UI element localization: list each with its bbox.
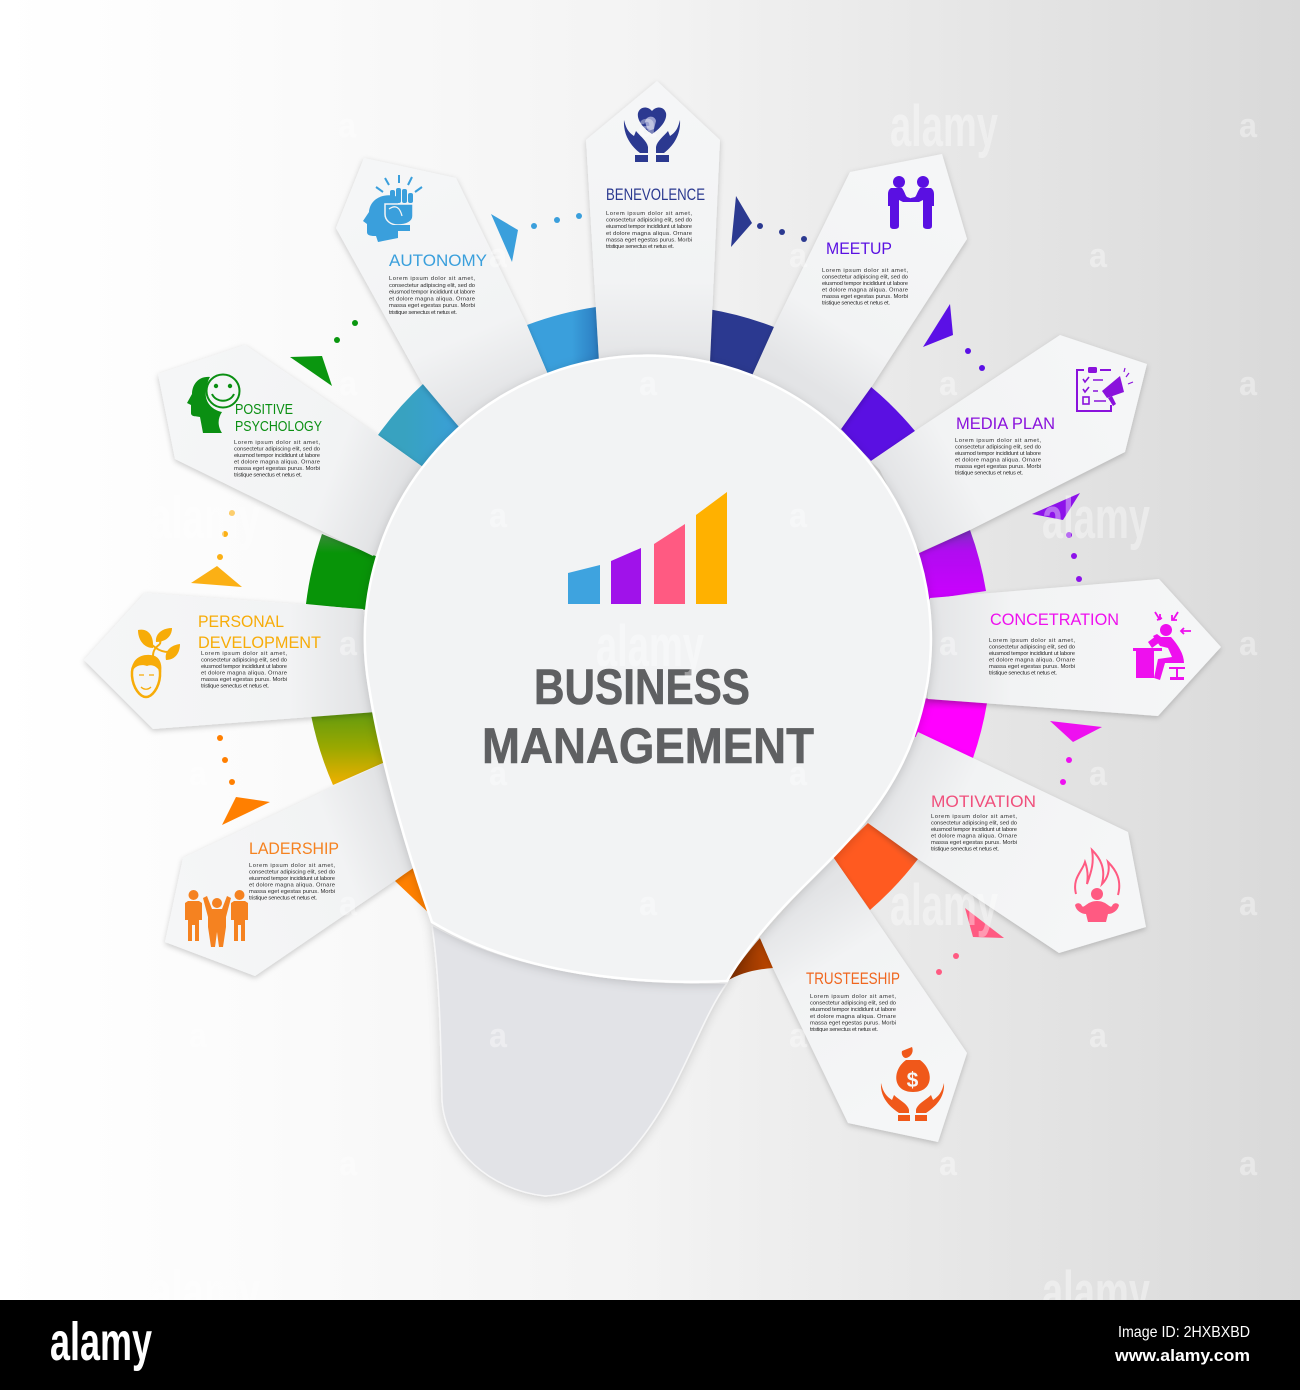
block: meetup indigo — [841, 386, 915, 461]
watermark pattern: a — [639, 365, 658, 403]
body text: eiusmod tempor incididunt ut labore — [989, 651, 1075, 657]
body text: tristique senectus et netus et. — [201, 684, 269, 690]
panel shape — [928, 579, 1221, 716]
watermark pattern: a — [1239, 885, 1258, 923]
body text — [989, 638, 1075, 676]
body text — [234, 440, 320, 478]
icon: flame over person — [1075, 850, 1119, 922]
heading: LADERSHIP — [249, 840, 339, 858]
connector: concentration arrow — [1050, 721, 1102, 785]
body text: eiusmod tempor incididunt ut labore — [606, 224, 692, 230]
heading: BENEVOLENCE — [606, 186, 705, 204]
panel shape — [586, 81, 720, 362]
body text: massa eget egestas purus. Morbi — [249, 889, 335, 895]
body text: tristique senectus et netus et. — [955, 470, 1023, 476]
connector: meetup arrow — [923, 304, 985, 371]
body text: tristique senectus et netus et. — [931, 846, 999, 852]
website: www.alamy.com — [1114, 1346, 1250, 1365]
body text: massa eget egestas purus. Morbi — [931, 840, 1017, 846]
colour blocks ring — [306, 307, 987, 981]
watermark pattern: a — [489, 497, 508, 535]
watermark pattern: a — [339, 1145, 358, 1183]
body text: eiusmod tempor incididunt ut labore — [955, 451, 1041, 457]
watermark pattern: alamy — [150, 1260, 260, 1325]
body text — [201, 651, 287, 690]
panel: personal development — [84, 593, 376, 729]
block: trusteeship brown — [727, 938, 773, 981]
title: BUSINESS — [534, 659, 750, 715]
block: leadership orange — [395, 862, 433, 917]
body text: consectetur adipiscing elit, sed do — [955, 444, 1041, 450]
body text: massa eget egestas purus. Morbi — [606, 237, 692, 243]
footer logo: alamy — [50, 1312, 152, 1372]
body text: eiusmod tempor incididunt ut labore — [389, 290, 475, 296]
block: positive psychology green — [306, 534, 378, 610]
panel: ladership — [165, 759, 425, 976]
icon: two people shaking hands — [888, 176, 934, 229]
icon: person at desk under pressure — [1133, 612, 1191, 680]
icon: hands holding money bag — [881, 1047, 944, 1121]
heading: MEETUP — [826, 240, 892, 258]
body text: massa eget egestas purus. Morbi — [989, 664, 1075, 670]
watermark pattern — [150, 94, 1258, 1325]
panel: benevolence — [586, 81, 720, 362]
heading: TRUSTEESHIP — [806, 970, 900, 988]
panel shape — [868, 732, 1146, 953]
watermark pattern: a — [639, 885, 658, 923]
body text — [606, 211, 692, 250]
panel shape — [158, 345, 427, 556]
connector: motivation arrow — [936, 908, 1004, 975]
panel shape — [165, 759, 425, 976]
panel: media plan — [871, 335, 1147, 552]
heading — [235, 402, 322, 435]
panel: autonomy — [336, 158, 552, 440]
panel shape — [84, 593, 376, 729]
body text — [810, 994, 896, 1033]
watermark pattern: a — [189, 1017, 208, 1055]
icon: hands holding heart — [624, 107, 680, 162]
body text: massa eget egestas purus. Morbi — [201, 677, 287, 683]
icon: hands holding money bag: $ — [907, 1069, 919, 1092]
body text: tristique senectus et netus et. — [989, 670, 1057, 676]
body text: et dolore magna aliqua. Ornare — [234, 460, 320, 466]
body text: eiusmod tempor incididunt ut labore — [234, 453, 320, 459]
body text: Lorem ipsum dolor sit amet, — [955, 438, 1041, 444]
heading: MOTIVATION — [931, 793, 1036, 811]
block: motivation orange — [833, 823, 918, 910]
watermark pattern: a — [339, 365, 358, 403]
body text: consectetur adipiscing elit, sed do — [606, 218, 692, 224]
body text: consectetur adipiscing elit, sed do — [201, 658, 287, 664]
body text: eiusmod tempor incididunt ut labore — [249, 876, 335, 882]
heading: POSITIVE — [235, 402, 293, 418]
panel: trusteeship — [760, 857, 967, 1142]
connector: benevolence arrow — [731, 196, 807, 247]
panel: motivation — [868, 732, 1146, 953]
panel shape — [760, 857, 967, 1142]
connector: leadership arrow — [217, 735, 270, 825]
icon: rising bar chart — [568, 492, 727, 604]
watermark pattern: alamy — [1042, 1260, 1150, 1325]
body text: eiusmod tempor incididunt ut labore — [931, 827, 1017, 833]
panel shape — [336, 158, 552, 440]
watermark pattern: a — [1239, 1145, 1258, 1183]
connector: media plan arrow — [1032, 493, 1082, 582]
body text: Lorem ipsum dolor sit amet, — [810, 994, 896, 1000]
body text: Lorem ipsum dolor sit amet, — [249, 863, 335, 869]
body text: eiusmod tempor incididunt ut labore — [822, 281, 908, 287]
body text: et dolore magna aliqua. Ornare — [810, 1014, 896, 1020]
heading — [198, 612, 321, 652]
heading: CONCETRATION — [990, 611, 1119, 629]
body text: massa eget egestas purus. Morbi — [234, 466, 320, 472]
watermark pattern: a — [638, 107, 657, 145]
body text: massa eget egestas purus. Morbi — [822, 294, 908, 300]
watermark pattern: a — [1089, 755, 1108, 793]
watermark pattern: a — [939, 365, 958, 403]
body text: tristique senectus et netus et. — [822, 300, 890, 306]
watermark pattern: a — [939, 1145, 958, 1183]
panel: meetup — [750, 154, 967, 429]
body text: tristique senectus et netus et. — [249, 896, 317, 902]
body text — [249, 863, 335, 902]
heading: PSYCHOLOGY — [235, 419, 322, 435]
body text: massa eget egestas purus. Morbi — [955, 464, 1041, 470]
body text: et dolore magna aliqua. Ornare — [955, 458, 1041, 464]
body text — [931, 814, 1017, 852]
heading: DEVELOPMENT — [198, 633, 321, 652]
body text: massa eget egestas purus. Morbi — [389, 303, 475, 309]
heading: MEDIA PLAN — [956, 415, 1055, 433]
title — [482, 659, 814, 774]
watermark pattern: a — [789, 237, 808, 275]
icon: head with growing leaves — [132, 628, 180, 697]
watermark pattern: a — [339, 625, 358, 663]
body text: consectetur adipiscing elit, sed do — [989, 644, 1075, 650]
body text: consectetur adipiscing elit, sed do — [389, 283, 475, 289]
title: MANAGEMENT — [482, 718, 814, 774]
body text: massa eget egestas purus. Morbi — [810, 1020, 896, 1026]
watermark pattern: a — [939, 625, 958, 663]
icon: head and fist — [363, 175, 422, 242]
body text: consectetur adipiscing elit, sed do — [822, 274, 908, 280]
body text: tristique senectus et netus et. — [606, 244, 674, 250]
body text: Lorem ipsum dolor sit amet, — [234, 440, 320, 446]
body text: tristique senectus et netus et. — [389, 310, 457, 316]
block: media plan violet — [915, 530, 986, 600]
watermark pattern: a — [189, 755, 208, 793]
body text: et dolore magna aliqua. Ornare — [249, 882, 335, 888]
panel shape — [871, 335, 1147, 552]
body text — [955, 438, 1041, 476]
block: personal development olive — [311, 710, 392, 785]
body text: Lorem ipsum dolor sit amet, — [822, 268, 908, 274]
watermark pattern: a — [1089, 237, 1108, 275]
block: autonomy blue — [527, 307, 602, 384]
watermark pattern: a — [1239, 365, 1258, 403]
heading: AUTONOMY — [389, 252, 487, 270]
watermark pattern: alamy — [890, 873, 998, 938]
bulb base — [432, 925, 727, 1196]
icon: head with smiley — [187, 374, 240, 433]
watermark pattern: a — [339, 885, 358, 923]
watermark pattern: a — [1089, 1017, 1108, 1055]
panel shape — [750, 154, 967, 429]
watermark pattern: a — [789, 1017, 808, 1055]
block: teal — [378, 383, 466, 470]
panel: concentration — [928, 579, 1221, 716]
watermark pattern: a — [789, 497, 808, 535]
heading: PERSONAL — [198, 612, 284, 631]
connector: personal development arrow — [191, 510, 242, 587]
watermark pattern: alamy — [596, 614, 704, 679]
watermark pattern: alamy — [150, 486, 260, 551]
body text: consectetur adipiscing elit, sed do — [810, 1001, 896, 1007]
body text: Lorem ipsum dolor sit amet, — [201, 651, 287, 657]
watermark pattern: a — [1239, 107, 1258, 145]
body text: et dolore magna aliqua. Ornare — [201, 670, 287, 676]
watermark pattern: alamy — [1042, 486, 1150, 551]
body text: et dolore magna aliqua. Ornare — [606, 231, 692, 237]
watermark pattern: a — [489, 755, 508, 793]
body text: et dolore magna aliqua. Ornare — [931, 834, 1017, 840]
footer bar — [0, 1300, 1300, 1390]
body text: consectetur adipiscing elit, sed do — [931, 820, 1017, 826]
icon: clipboard and megaphone — [1077, 367, 1133, 411]
block: concentration magenta — [910, 698, 987, 758]
body text: consectetur adipiscing elit, sed do — [234, 446, 320, 452]
body text: consectetur adipiscing elit, sed do — [249, 870, 335, 876]
body text: Lorem ipsum dolor sit amet, — [931, 814, 1017, 820]
watermark pattern: a — [489, 1017, 508, 1055]
icon: three business people — [185, 890, 248, 947]
body text: et dolore magna aliqua. Ornare — [989, 658, 1075, 664]
body text: et dolore magna aliqua. Ornare — [389, 296, 475, 302]
watermark pattern: a — [338, 107, 357, 145]
panel: positive psychology — [158, 345, 427, 556]
watermark pattern: a — [789, 755, 808, 793]
body text: et dolore magna aliqua. Ornare — [822, 288, 908, 294]
bulb head — [365, 356, 931, 982]
body text: tristique senectus et netus et. — [234, 472, 302, 478]
connector: autonomy arrow — [491, 213, 582, 262]
body text — [822, 268, 908, 306]
body text — [389, 276, 475, 316]
block: benevolence navy — [702, 309, 774, 376]
body text: eiusmod tempor incididunt ut labore — [810, 1007, 896, 1013]
body text: eiusmod tempor incididunt ut labore — [201, 664, 287, 670]
connector: positive psychology arrow — [290, 320, 358, 386]
body text: Lorem ipsum dolor sit amet, — [606, 211, 692, 217]
body text: Lorem ipsum dolor sit amet, — [389, 276, 475, 282]
image id: Image ID: 2HXBXBD — [1118, 1324, 1250, 1341]
watermark pattern: alamy — [890, 94, 998, 159]
body text: tristique senectus et netus et. — [810, 1027, 878, 1033]
body text: Lorem ipsum dolor sit amet, — [989, 638, 1075, 644]
watermark pattern: a — [489, 237, 508, 275]
watermark pattern: a — [1239, 625, 1258, 663]
